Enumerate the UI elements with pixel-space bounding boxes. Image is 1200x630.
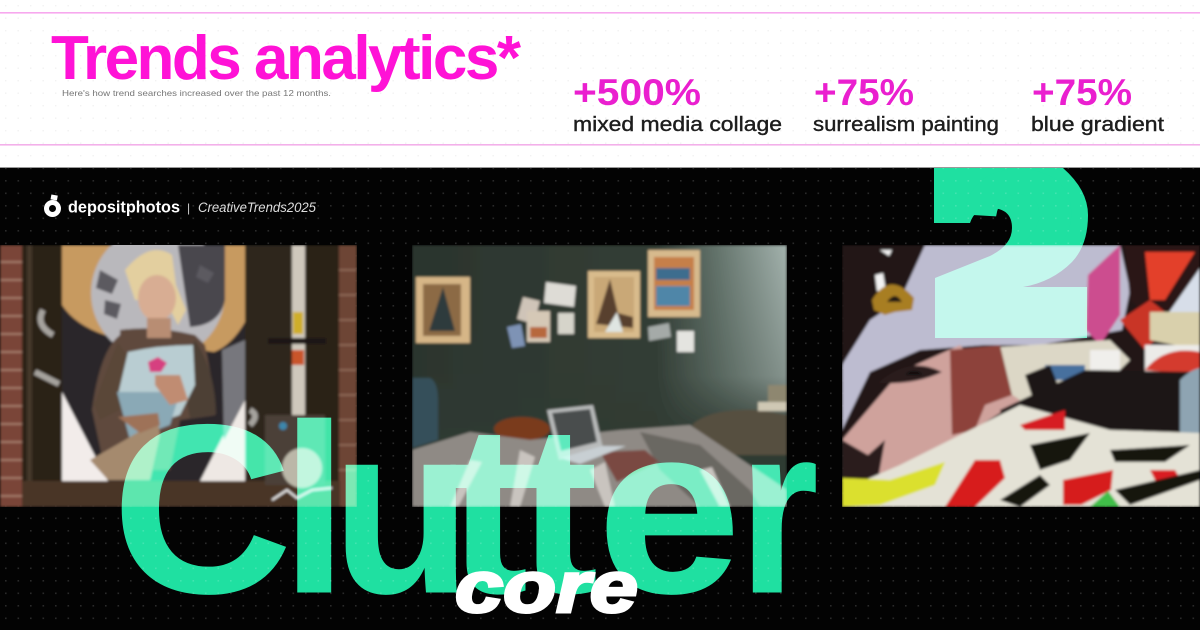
brand logo: CreativeTrends2025: [198, 200, 316, 215]
stat: blue gradient: [1031, 72, 1164, 136]
title: Trends analytics*: [51, 24, 522, 93]
frame 1: [416, 277, 470, 343]
stat: mixed media collage: mixed media collage: [573, 114, 782, 136]
books: [758, 385, 787, 411]
frame 3: [648, 250, 700, 317]
stat: surrealism painting: surrealism painting: [813, 114, 999, 136]
chair: [412, 378, 438, 448]
header background: [0, 0, 1200, 168]
stat: surrealism painting: +75%: [814, 72, 914, 113]
stat: blue gradient: +75%: [1032, 72, 1132, 113]
pillow: [692, 410, 787, 455]
heading: Clutter: [112, 374, 818, 630]
stat: mixed media collage: +500%: [573, 72, 701, 113]
big numeral 2: 2: [955, 122, 1083, 379]
stat: mixed media collage: [573, 72, 782, 136]
bed: [412, 425, 787, 507]
photo: tattooed woman mural: [0, 226, 357, 507]
guitar: [494, 417, 550, 441]
icon: depositphotos mark: [46, 195, 58, 214]
laptop: [547, 405, 626, 464]
stat: surrealism painting: [813, 72, 999, 136]
frame 2: [588, 271, 640, 338]
photo: green bedroom with framed art: [412, 245, 787, 507]
subtitle: Here's how trend searches increased over the past 12 months.: [62, 89, 331, 98]
photo: torn paper collage: [842, 245, 1200, 507]
heading: core: core: [455, 548, 638, 628]
pinned photos: [507, 282, 694, 352]
big numeral 2: [934, 168, 1088, 338]
brand logo: [46, 195, 316, 216]
stat: blue gradient: blue gradient: [1031, 114, 1164, 136]
brand logo: |: [187, 201, 190, 215]
brand logo: depositphotos: [68, 198, 180, 216]
black panel background: [0, 167, 1200, 630]
